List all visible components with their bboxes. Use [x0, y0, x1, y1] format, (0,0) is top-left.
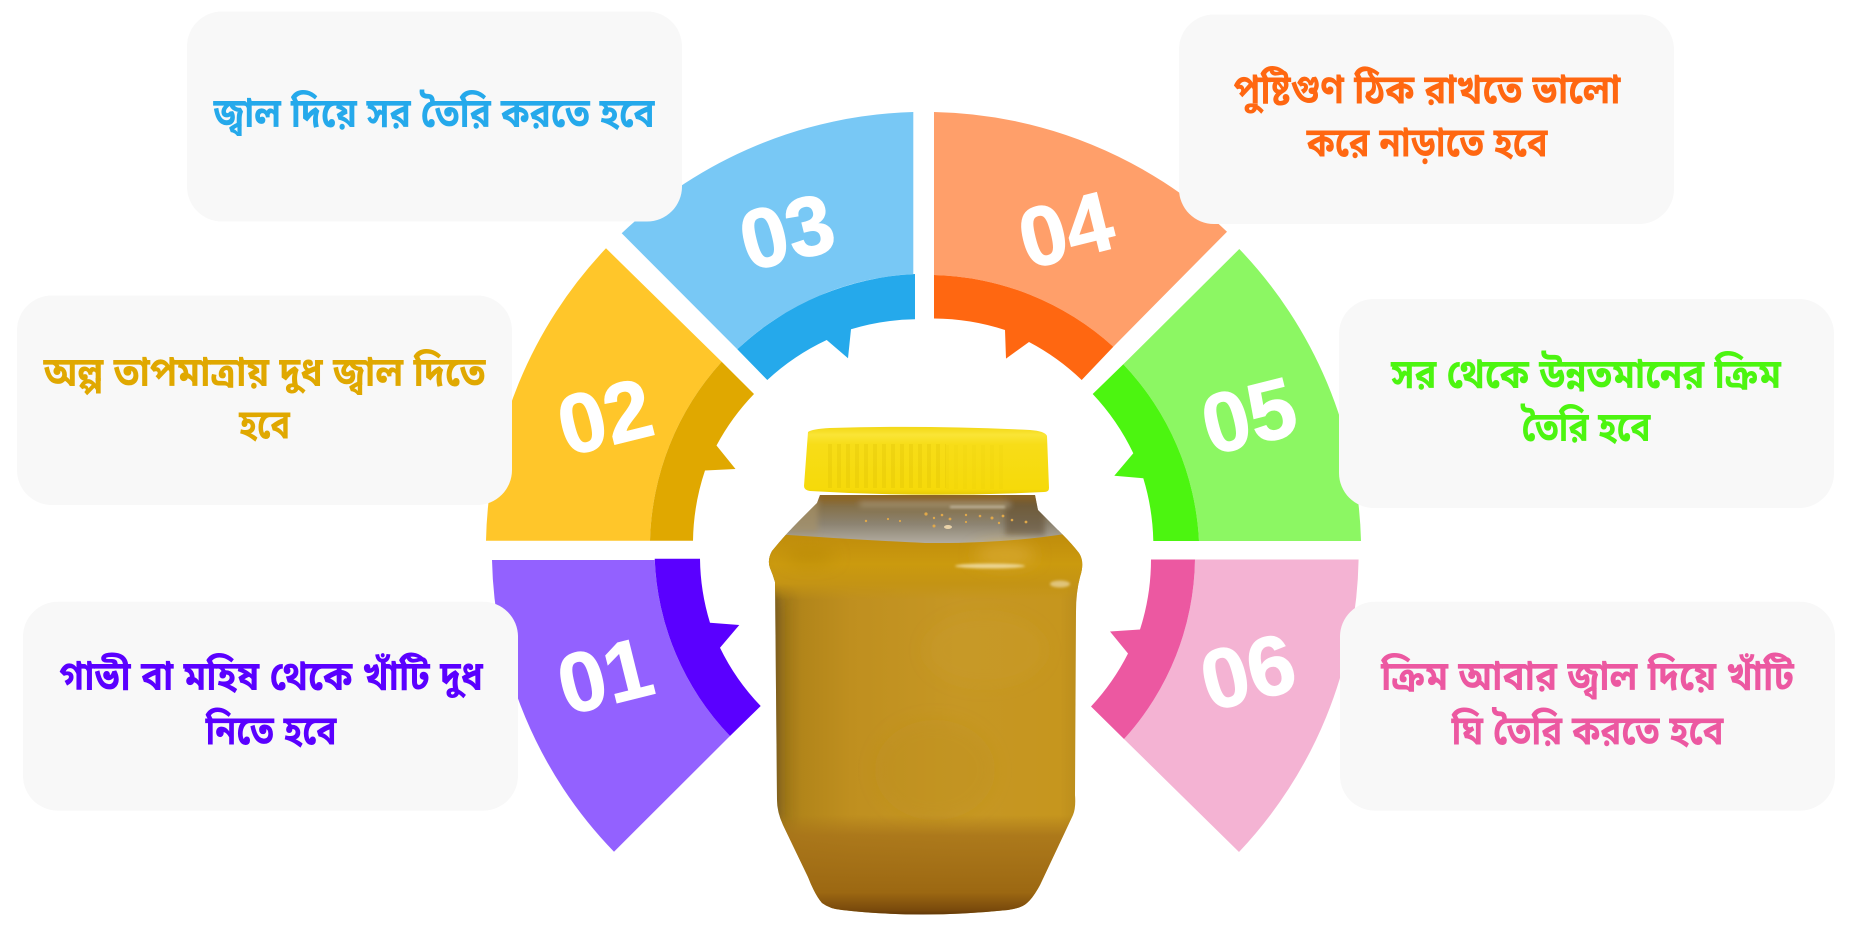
- segment 02: [486, 248, 754, 541]
- segment 03: [622, 112, 915, 380]
- segment 01: 01: [548, 619, 662, 733]
- segment 06: 06: [1191, 615, 1305, 729]
- segment 04: [934, 112, 1227, 380]
- callout 02: অল্প তাপমাত্রায় দুধ জ্বাল দিতে: [43, 349, 487, 396]
- callout 02: [17, 296, 512, 505]
- callout 04: করে নাড়াতে হবে: [1306, 120, 1549, 166]
- callout 04: [1179, 14, 1674, 224]
- icon: ghee jar: [760, 427, 1090, 925]
- callout 05: [1339, 299, 1834, 508]
- callout 06: ঘি তৈরি করতে হবে: [1451, 706, 1725, 753]
- callout 05: সর থেকে উন্নতমানের ক্রিম: [1390, 350, 1781, 397]
- segment 03: 03: [730, 175, 844, 289]
- callout 03: জ্বাল দিয়ে সর তৈরি করতে হবে: [213, 89, 656, 136]
- callout 01: গাভী বা মহিষ থেকে খাঁটি দুধ: [59, 652, 484, 699]
- callout 06: [1340, 602, 1835, 811]
- segment 06: [1091, 560, 1359, 852]
- callout 01: [23, 602, 518, 811]
- callout 04: পুষ্টিগুণ ঠিক রাখতে ভালো: [1234, 65, 1622, 114]
- segment 04: 04: [1009, 173, 1123, 287]
- segment 02: 02: [548, 360, 662, 474]
- callout 03: [187, 12, 682, 222]
- callout 01: নিতে হবে: [205, 707, 338, 753]
- segment 01: [492, 559, 761, 852]
- callout 02: হবে: [238, 402, 291, 448]
- callout 06: ক্রিম আবার জ্বাল দিয়ে খাঁটি: [1380, 652, 1795, 699]
- segment 05: 05: [1192, 359, 1306, 473]
- callout 05: তৈরি হবে: [1520, 403, 1652, 450]
- segment 05: [1093, 249, 1361, 541]
